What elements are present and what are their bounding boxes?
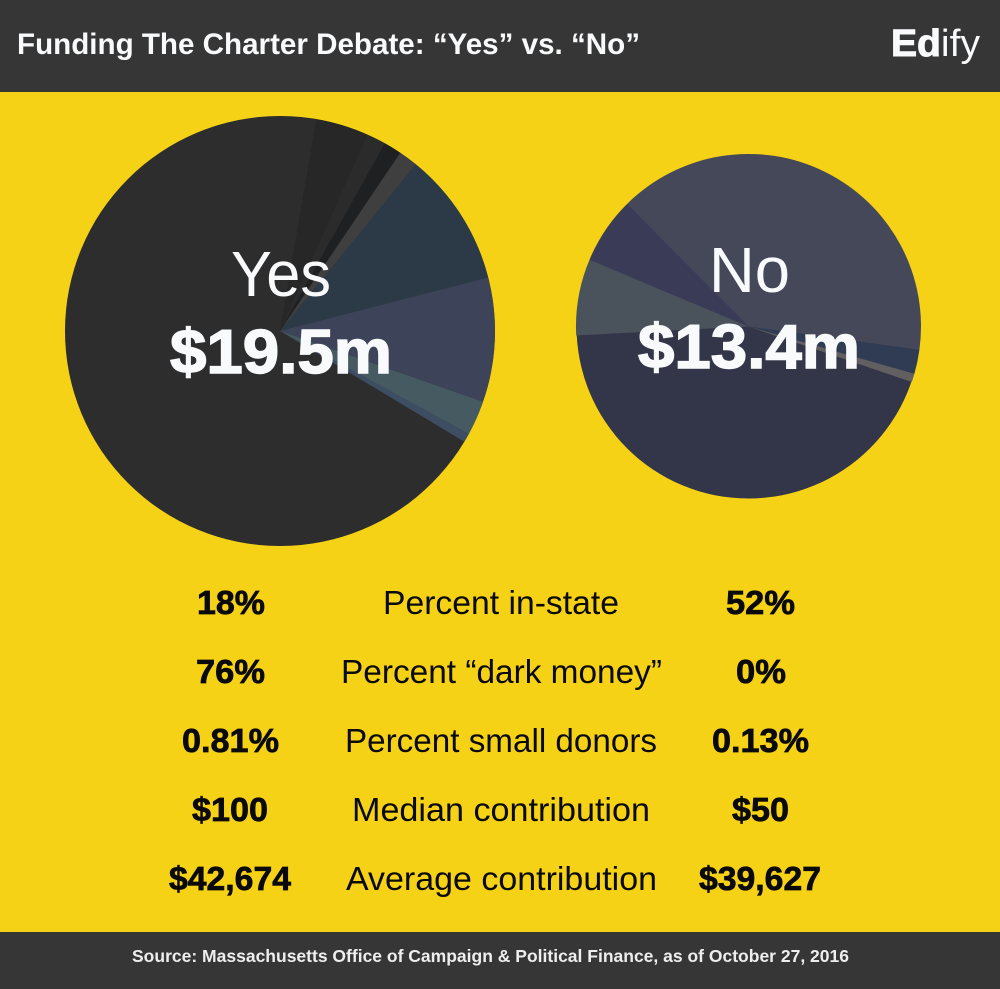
row: average contribution: $42,674 (169, 860, 292, 897)
row: percent dark money (196, 653, 786, 690)
pie chart: Yes (65, 116, 495, 546)
row: median contribution: $100 (192, 791, 268, 828)
row: percent dark money: Percent “dark money” (341, 653, 662, 690)
row: percent in-state: 52% (726, 584, 795, 621)
amount: $19.5m: $19.5m (170, 318, 392, 387)
row: median contribution (192, 791, 789, 828)
row: percent dark money: 76% (196, 653, 265, 690)
row: percent small donors: 0.81% (182, 722, 279, 759)
row: percent in-state: 18% (197, 584, 265, 621)
source note: Source: Massachusetts Office of Campaign & Political Finance, as of October 27, 2016 (132, 946, 849, 966)
title: Funding The Charter Debate: “Yes” vs. “No” (17, 28, 640, 61)
comparison table (169, 584, 821, 897)
row: percent small donors: Percent small donors (345, 722, 657, 759)
row: percent dark money: 0% (736, 653, 786, 690)
label: No: No (709, 234, 790, 306)
row: median contribution: $50 (732, 791, 789, 828)
row: median contribution: Median contribution (352, 791, 650, 828)
row: percent in-state: Percent in-state (383, 584, 619, 621)
row: percent in-state (197, 584, 795, 621)
amount: $13.4m: $13.4m (638, 313, 860, 382)
header bar (0, 0, 1000, 92)
logo: Edify: Edify (891, 23, 980, 65)
row: average contribution: Average contribution (346, 860, 657, 897)
label: Yes: Yes (231, 238, 331, 310)
pie chart: No (576, 154, 921, 498)
row: average contribution: $39,627 (699, 860, 821, 897)
footer bar (0, 932, 1000, 989)
row: average contribution (169, 860, 821, 897)
row: percent small donors (182, 722, 809, 759)
row: percent small donors: 0.13% (712, 722, 809, 759)
